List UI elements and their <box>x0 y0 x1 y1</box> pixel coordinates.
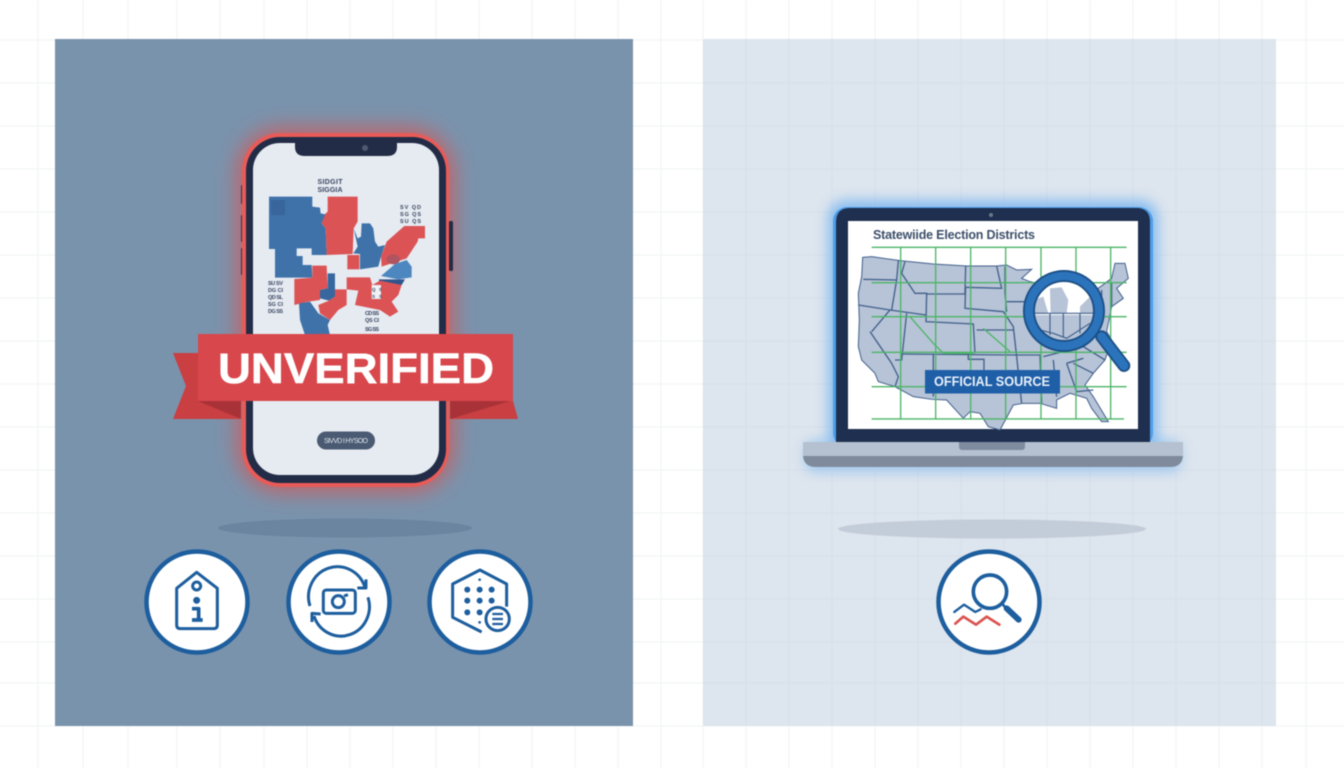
phone map legends: QS <box>372 287 382 292</box>
phone map legends: SU SV <box>268 281 283 287</box>
phone with red glow <box>236 127 455 493</box>
phone map legends: SS <box>372 294 382 299</box>
phone map legends: SG SS <box>365 327 379 333</box>
phone map caption <box>318 179 343 194</box>
panel: official source <box>703 39 1276 726</box>
icon: data hexagon with list <box>430 552 530 652</box>
laptop screen title: Statewiide Election Districts <box>873 228 1035 242</box>
phone map legends: SG CI <box>268 302 283 308</box>
phone map legends: CD SS <box>365 311 379 317</box>
phone map legends: QD SL <box>268 295 284 301</box>
magnifier <box>1029 276 1124 366</box>
phone screen pill <box>317 432 375 450</box>
phone map legends: QS CI <box>365 318 379 324</box>
panel: unverified source <box>55 39 633 726</box>
icon: camera with rotation arrows <box>288 552 390 652</box>
laptop with blue glow <box>803 200 1183 472</box>
laptop base <box>803 442 1183 467</box>
phone map legends: DG SS <box>268 309 283 315</box>
icon: magnifier over trend lines <box>938 552 1040 652</box>
floor shadow under laptop <box>838 520 1146 538</box>
phone map legends: DG CI <box>268 288 283 294</box>
unofficial district map <box>269 197 425 335</box>
phone map legends: SV QD <box>400 205 421 211</box>
phone map caption: SIGGIA <box>318 187 342 194</box>
phone map caption: SIDGIT <box>318 179 343 186</box>
official US district map <box>858 247 1128 430</box>
phone map legends: SG QS <box>400 212 421 218</box>
floor shadow under phone <box>218 518 472 538</box>
banner: unverified <box>173 334 518 419</box>
phone screen pill: SIVVD I HYSOO <box>324 438 369 445</box>
official source label: OFFICIAL SOURCE <box>934 373 1050 389</box>
banner: unverified: UNVERIFIED <box>218 345 494 393</box>
phone map legends <box>268 205 421 333</box>
phone notch <box>295 143 397 156</box>
phone map legends: SU QS <box>400 219 421 225</box>
official source label <box>925 370 1060 394</box>
icon: info tag <box>146 552 248 652</box>
